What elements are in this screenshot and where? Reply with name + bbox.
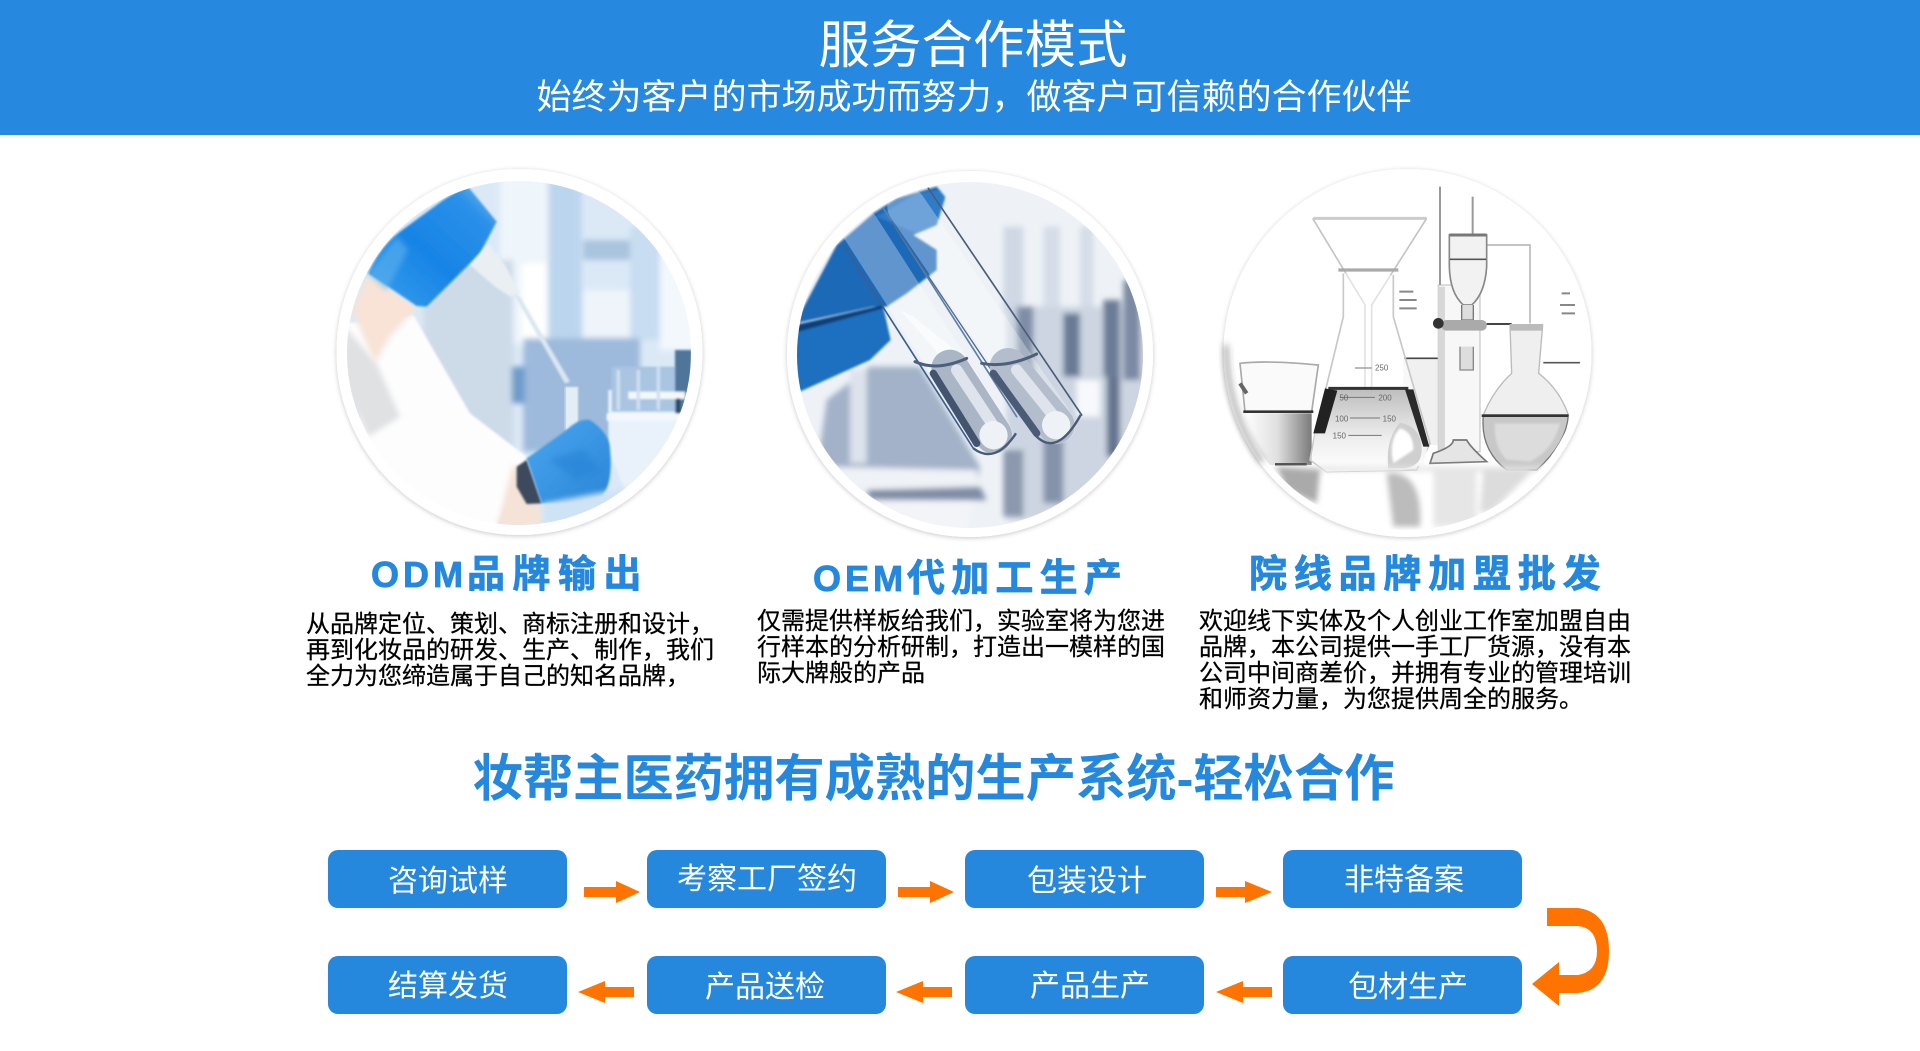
header band xyxy=(0,0,1920,135)
text: chain brand description: 品牌，本公司提供一手工厂货源，没有本 xyxy=(1199,634,1631,661)
text: OEM description: 际大牌般的产品 xyxy=(757,660,925,687)
text: ODM description xyxy=(306,610,714,690)
flow: step 4: 非特备案 xyxy=(1344,864,1464,897)
text: chain brand description xyxy=(1199,608,1631,713)
arrow: curved down-turn xyxy=(1532,908,1609,1006)
arrow: step 2 to 3 xyxy=(898,881,954,903)
arrow: step 6 to 7 xyxy=(896,981,952,1003)
text: OEM description: 行样本的分析研制，打造出一模样的国 xyxy=(757,634,1165,661)
subtitle: 始终为客户的市场成功而努力，做客户可信赖的合作伙伴 xyxy=(536,78,1412,117)
photo: glassware circle: 150 xyxy=(1333,432,1347,441)
photo: glassware circle: 150 xyxy=(1383,414,1397,423)
flow: step 7: 产品送检 xyxy=(705,971,825,1004)
flow: step 2 xyxy=(647,850,886,908)
flow: step 3: 包装设计 xyxy=(1027,865,1147,898)
heading: ODM: ODM品牌输出 xyxy=(371,554,649,596)
flow: step 7 xyxy=(647,956,886,1014)
flow: step 8 xyxy=(328,956,566,1014)
photo: glassware circle: 200 xyxy=(1378,394,1392,403)
flow: step 4 xyxy=(1283,850,1522,908)
photo: pipette lab circle xyxy=(334,168,705,538)
flow: step 5: 包材生产 xyxy=(1348,971,1468,1004)
flow: step 3 xyxy=(965,850,1204,908)
arrow: step 5 to 6 xyxy=(1216,981,1272,1003)
heading: OEM: OEM代加工生产 xyxy=(813,558,1128,600)
photo: glassware circle: 250 xyxy=(1375,364,1389,373)
photo: glassware circle: 50 xyxy=(1339,394,1349,403)
heading: chain brand: 院线品牌加盟批发 xyxy=(1249,554,1607,596)
flow: step 2: 考察工厂签约 xyxy=(677,863,857,896)
flow: step 6: 产品生产 xyxy=(1030,970,1150,1003)
text: chain brand description: 欢迎线下实体及个人创业工作室加盟自由 xyxy=(1199,608,1631,634)
photo: glassware circle: 100 xyxy=(1335,414,1349,423)
flow: step 1 xyxy=(328,850,566,908)
photo: test tubes circle xyxy=(784,170,1156,540)
text: ODM description: 再到化妆品的研发、生产、制作，我们 xyxy=(306,637,714,664)
panel: ODM xyxy=(306,554,714,690)
flow: step 1: 咨询试样 xyxy=(388,865,508,898)
arrow: step 3 to 4 xyxy=(1216,881,1272,903)
text: chain brand description: 和师资力量，为您提供周全的服务。 xyxy=(1199,686,1583,713)
text: OEM description: 仅需提供样板给我们，实验室将为您进 xyxy=(757,608,1165,634)
arrow: step 1 to 2 xyxy=(584,881,640,903)
text: ODM description: 全力为您缔造属于自己的知名品牌， xyxy=(306,663,690,690)
text: chain brand description: 公司中间商差价，并拥有专业的管理培训 xyxy=(1199,660,1631,687)
panel: chain brand xyxy=(1199,554,1631,713)
flow: step 8: 结算发货 xyxy=(388,970,508,1003)
flow: step 6 xyxy=(965,956,1204,1014)
panel: OEM xyxy=(757,558,1165,687)
photo: glassware circle xyxy=(1219,168,1594,540)
section heading: 妆帮主医药拥有成熟的生产系统-轻松合作 xyxy=(472,750,1395,807)
text: ODM description: 从品牌定位、策划、商标注册和设计， xyxy=(306,610,714,638)
arrow: step 7 to 8 xyxy=(578,981,634,1003)
flow: step 5 xyxy=(1283,956,1522,1014)
text: OEM description xyxy=(757,608,1165,687)
title: 服务合作模式 xyxy=(818,16,1128,74)
